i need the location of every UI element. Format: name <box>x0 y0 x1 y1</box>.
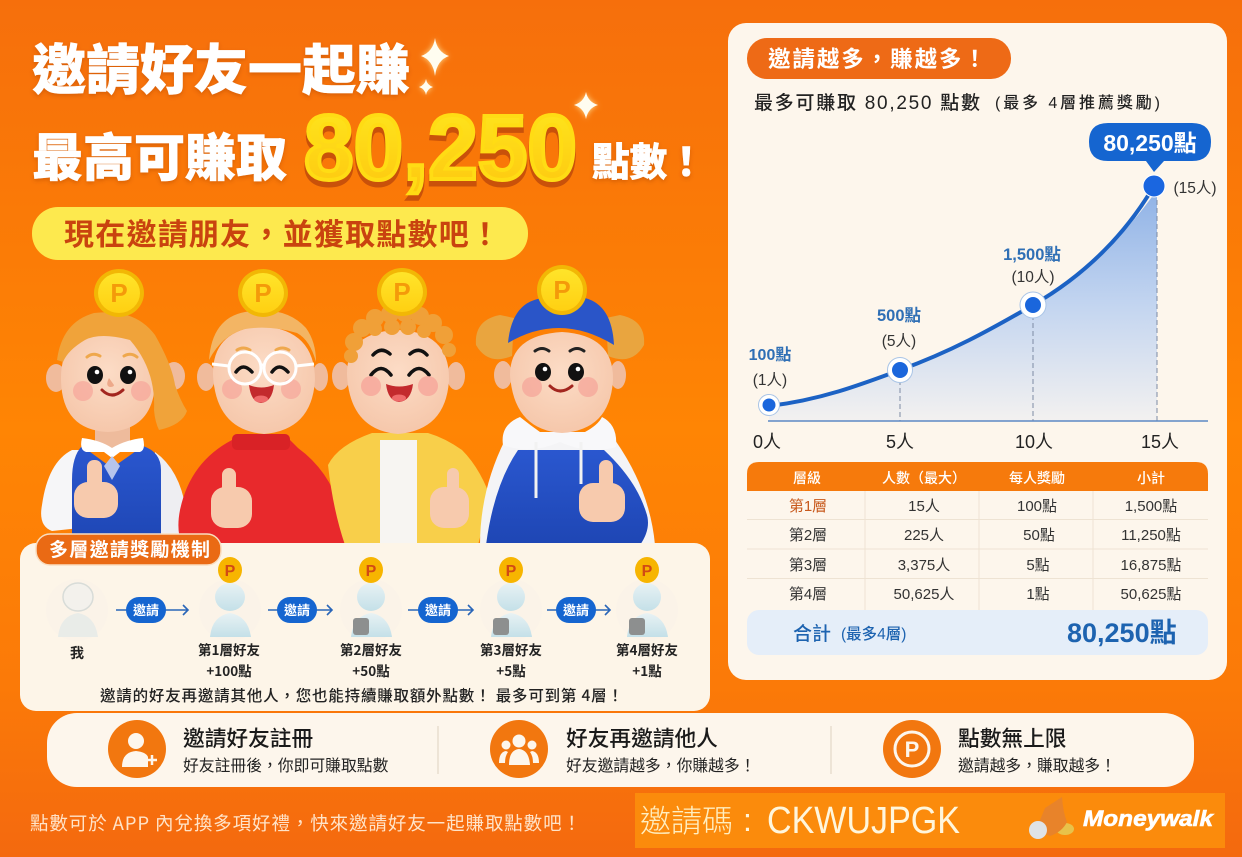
figure: level 4 friend: 第4層好友 <box>616 639 678 659</box>
title: headline line 1: 邀請好友一起賺 <box>32 26 410 105</box>
benefit: friends invite: 好友再邀請他人 <box>566 722 718 753</box>
data point 2: 500點 <box>877 306 921 325</box>
table row 3: 3,375人 <box>898 557 950 574</box>
data point 3: (10人) <box>1011 268 1055 286</box>
panel: three benefits <box>47 713 1194 787</box>
table total: 合計 <box>793 619 831 646</box>
figure: me: 我 <box>70 643 84 663</box>
benefit: unlimited points: 點數無上限 <box>958 722 1067 753</box>
table row 2 <box>789 526 1181 544</box>
table grid lines <box>747 491 1208 610</box>
table row 3: 5點 <box>1026 557 1050 574</box>
icon: P coin <box>883 720 941 778</box>
panel: multi-level invitation <box>20 534 710 711</box>
benefit: register <box>108 720 389 778</box>
table row 1 <box>789 497 1177 515</box>
figure: me <box>46 579 108 663</box>
figure: level 1 friend: P <box>225 563 236 580</box>
figure: level 1 friend <box>198 557 261 680</box>
data point 1 <box>749 346 791 416</box>
table total: (最多4層) <box>841 625 906 643</box>
figure: level 2 friend: 第2層好友 <box>340 639 402 659</box>
data point 3 <box>1003 245 1061 318</box>
table row 3: 16,875點 <box>1121 557 1181 574</box>
table header: 小計 <box>1137 468 1165 488</box>
icon: P coin: P <box>905 737 919 762</box>
invite code bar <box>635 793 1225 848</box>
table row 4: 第4層 <box>789 585 827 603</box>
subheading: 最多可賺取 80,250 點數 <box>754 92 980 114</box>
table total <box>747 610 1208 655</box>
text: invite code <box>640 796 960 842</box>
figure: level 4 friend <box>616 557 678 680</box>
figure: level 3 friend: 第3層好友 <box>480 639 542 659</box>
chart: points growth curve <box>749 123 1217 452</box>
data point 1: (1人) <box>753 371 787 389</box>
icon: group <box>490 720 548 778</box>
table header: 層級 <box>793 468 821 488</box>
panel: invite more earn more <box>728 23 1227 680</box>
character: woman in blue vest: P <box>110 278 128 308</box>
table row 2: 11,250點 <box>1121 527 1181 544</box>
table row 2: 225人 <box>904 527 944 544</box>
data point 2: (5人) <box>882 332 916 350</box>
icon: sparkles near headline <box>419 38 598 119</box>
data point 4 <box>1143 175 1217 197</box>
data point 4: (15人) <box>1173 179 1217 197</box>
table row 2: 50點 <box>1023 527 1055 544</box>
footer note: 點數可於 APP 內兌換多項好禮，快來邀請好友一起賺取點數吧！ <box>30 810 581 836</box>
figure: level 4 friend: +1點 <box>632 660 662 680</box>
text: invite code: : <box>743 802 752 838</box>
table row 1: 15人 <box>908 498 940 515</box>
x axis <box>768 420 1208 422</box>
text: big yellow number: 80,250 <box>304 97 577 199</box>
table row 4: 50,625人 <box>894 586 954 603</box>
x axis labels: 10人 <box>1015 432 1053 452</box>
callout: top value: 80,250點 <box>1103 130 1197 156</box>
benefit: register: 邀請好友註冊 <box>183 722 313 753</box>
table row 4 <box>789 585 1181 603</box>
table: rewards by level <box>747 462 1208 655</box>
character: curly-haired man in yellow jacket <box>328 268 493 545</box>
icon: add user <box>108 720 166 778</box>
banner: invite now: 現在邀請朋友，並獲取點數吧！ <box>64 210 500 254</box>
label: panel tab: 多層邀請獎勵機制 <box>49 535 210 562</box>
text: invite code: 邀請碼 <box>640 796 733 841</box>
benefit: register: 好友註冊後，你即可賺取點數 <box>183 753 389 776</box>
x axis labels: 5人 <box>886 432 914 452</box>
figure: level 1 friend: +100點 <box>206 660 252 680</box>
character: cap-wearing person in blue hoodie <box>476 265 655 545</box>
text: panel note: 邀請的好友再邀請其他人，您也能持續賺取額外點數！ 最多可到第 4層！ <box>100 684 623 706</box>
table total: 80,250點 <box>1067 618 1177 648</box>
figure: level 3 friend <box>480 557 542 680</box>
text: big yellow number: 80,250 <box>304 102 577 204</box>
arrow: invite 2: 邀請 <box>284 600 310 619</box>
figure: level 3 friend: P <box>506 563 517 580</box>
data point 2 <box>877 306 921 382</box>
table header: 人數（最大） <box>882 468 966 488</box>
benefit: friends invite: 好友邀請越多，你賺越多！ <box>566 753 756 776</box>
data point 3: 1,500點 <box>1003 245 1061 264</box>
figure: level 1 friend: 第1層好友 <box>198 639 260 659</box>
table row 4: 50,625點 <box>1121 586 1181 603</box>
arrow: invite 1 <box>116 597 188 623</box>
figure: level 2 friend <box>340 557 402 680</box>
arrow: invite 2 <box>268 597 332 623</box>
benefit: unlimited points: 邀請越多，賺取越多！ <box>958 753 1116 776</box>
table row 1: 第1層 <box>789 497 827 515</box>
chart area fill <box>769 190 1157 421</box>
table row 4: 1點 <box>1026 586 1050 603</box>
text: invite code: CKWUJPGK <box>767 800 960 842</box>
heading pill <box>747 38 1011 79</box>
arrow: invite 4: 邀請 <box>563 600 589 619</box>
icon: sneaker logo <box>1029 797 1074 839</box>
callout: top value <box>1089 123 1211 172</box>
arrow: invite 3: 邀請 <box>425 600 451 619</box>
table row 3: 第3層 <box>789 556 827 574</box>
subheading: (最多 4層推薦獎勵) <box>995 94 1160 112</box>
character: cap-wearing person in blue hoodie: P <box>553 275 571 305</box>
table row 3 <box>789 556 1181 574</box>
curve line <box>769 186 1154 406</box>
heading pill: 邀請越多，賺越多！ <box>768 42 986 74</box>
text: highest earn label: 最高可賺取 <box>32 117 287 191</box>
text: brand name: Moneywalk <box>1083 806 1215 831</box>
arrow: invite 1: 邀請 <box>133 600 159 619</box>
arrow: invite 3 <box>408 597 473 623</box>
x axis labels: 15人 <box>1141 432 1179 452</box>
x axis labels: 0人 <box>753 432 781 452</box>
subheading <box>754 92 1160 114</box>
x axis labels <box>753 432 1179 452</box>
text: points suffix: 點數！ <box>592 132 705 188</box>
table header <box>747 462 1208 491</box>
table header: 每人獎勵 <box>1009 468 1065 488</box>
illustration: four characters with coins <box>41 265 655 545</box>
character: woman in blue vest <box>41 269 187 545</box>
arrow: invite 4 <box>547 597 610 623</box>
table row 1: 1,500點 <box>1125 498 1177 515</box>
table row 1: 100點 <box>1017 498 1057 515</box>
figure: level 2 friend: P <box>366 563 377 580</box>
title: headline line 2 <box>32 97 705 204</box>
table row 2: 第2層 <box>789 526 827 544</box>
benefit: friends invite <box>490 720 756 778</box>
character: curly-haired man in yellow jacket: P <box>393 277 411 307</box>
character: man with glasses in red sweater: P <box>254 278 272 308</box>
character: man with glasses in red sweater <box>178 269 347 545</box>
data point 1: 100點 <box>749 346 791 364</box>
figure: level 4 friend: P <box>642 563 653 580</box>
figure: level 3 friend: +5點 <box>496 660 526 680</box>
benefit: unlimited points <box>883 720 1116 778</box>
figure: level 2 friend: +50點 <box>352 660 390 680</box>
